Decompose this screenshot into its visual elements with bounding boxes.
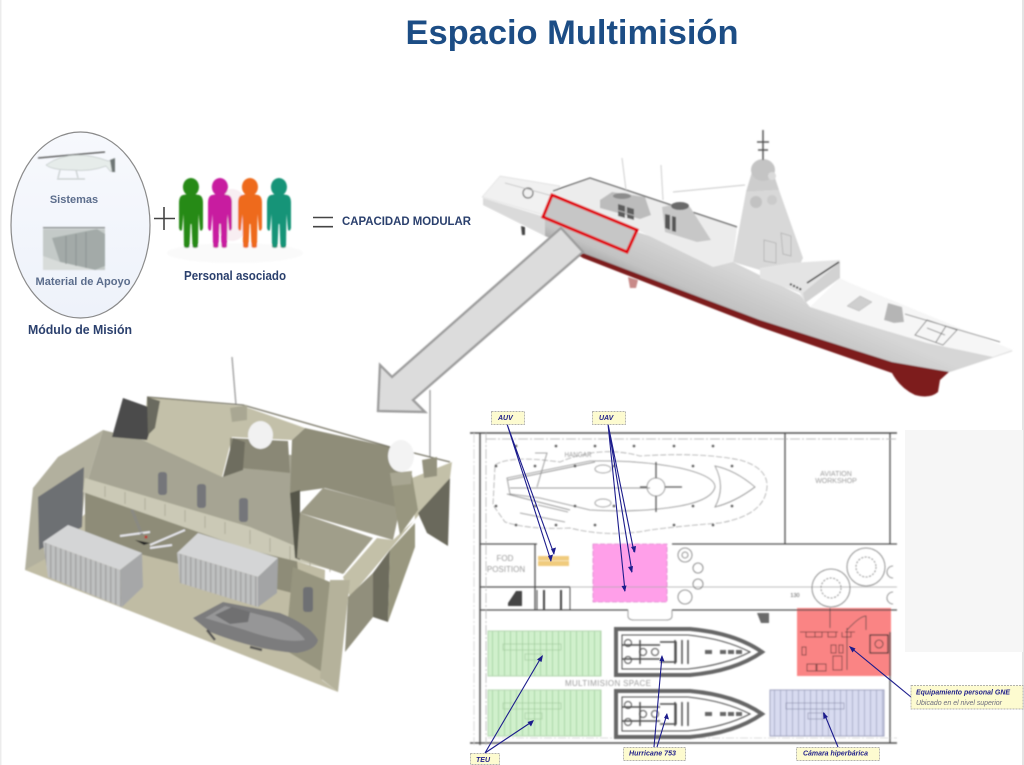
callout: Equipamiento personal GNE: Ubicado en el nivel superior — [916, 700, 1003, 707]
arrow: Equipamiento personal — [849, 646, 911, 697]
green TEU 2 — [488, 690, 601, 736]
icon: equals sign — [313, 218, 333, 227]
pink UAV zone — [593, 544, 667, 602]
back wall upper — [85, 430, 297, 560]
callout: Hurricane 753 — [624, 748, 686, 760]
roof rail — [553, 178, 737, 227]
structure lines — [470, 433, 897, 745]
label: FOD position: FOD — [497, 554, 514, 563]
icon: associated personnel — [167, 178, 303, 263]
arrow: UAV — [608, 424, 636, 592]
hull side panel dark — [373, 550, 390, 622]
arrow: TEU — [485, 655, 543, 753]
label: CAPACIDAD MODULAR: CAPACIDAD MODULAR — [342, 216, 472, 228]
callout: UAV — [592, 412, 626, 424]
bow gun — [884, 303, 904, 323]
label: Sistemas: Sistemas — [50, 194, 98, 206]
hyperbaric chamber container — [770, 690, 884, 736]
hangar roof — [553, 178, 737, 267]
roof module — [600, 192, 651, 219]
model: multi-mission hangar cutaway — [25, 357, 452, 692]
red lower hull — [545, 234, 950, 396]
window — [239, 498, 248, 522]
main mast — [757, 130, 769, 160]
label: workshop: WORKSHOP — [815, 478, 857, 485]
label: Módulo de Misión: Módulo de Misión — [28, 323, 132, 337]
funnel — [662, 203, 711, 242]
bridge block — [760, 260, 840, 303]
callout: TEU — [470, 754, 500, 764]
callout: Hurricane 753: Hurricane 753 — [629, 750, 676, 758]
window — [197, 484, 206, 508]
photo: support container — [43, 227, 105, 270]
callout: Cámara hiperbárica — [796, 748, 880, 760]
skeg — [628, 277, 638, 288]
UAV on floor — [120, 530, 185, 548]
front wall edge — [320, 580, 350, 692]
radome right — [388, 440, 414, 486]
rescue boat 2 — [616, 691, 762, 737]
red personnel zone — [797, 608, 891, 676]
hull side — [483, 200, 1013, 372]
personnel room furniture — [800, 608, 888, 671]
highlighted multi-mission space — [543, 195, 637, 252]
RHIB boat — [193, 602, 318, 653]
rescue boat 1 — [616, 629, 762, 675]
thin masts on roof — [622, 158, 745, 200]
green TEU 1 — [488, 631, 601, 676]
main tower — [733, 190, 803, 272]
plan: deck layout drawing — [470, 433, 897, 745]
callout arrows — [485, 424, 911, 753]
balcony — [83, 478, 345, 573]
small roof bases — [230, 405, 247, 422]
callout: TEU: TEU — [476, 757, 491, 764]
hangar tie-down dots — [495, 445, 733, 526]
callout: Equipamiento personal GNE: Equipamiento personal GNE — [916, 690, 1010, 696]
label: hangar: HANGAR — [564, 452, 592, 459]
stern flight deck — [482, 176, 560, 216]
left wall — [25, 430, 103, 570]
arrow: ship to module — [378, 228, 583, 412]
icon: plus sign — [154, 207, 175, 230]
callout: Equipamiento personal GNE — [911, 686, 1023, 709]
helicopter outline — [493, 452, 767, 534]
deck fittings — [678, 548, 893, 607]
callout: UAV: UAV — [599, 415, 615, 422]
panel: módulo de misión — [11, 132, 150, 337]
lower right wall — [285, 567, 330, 672]
dark niche — [290, 490, 300, 560]
roof deck — [143, 397, 305, 477]
stair details — [508, 590, 769, 623]
ship: frigate render — [482, 130, 1013, 396]
arrow: Cámara hiperbárica — [823, 712, 838, 747]
arrow: Hurricane 753 — [654, 655, 669, 747]
callout: AUV — [492, 412, 524, 424]
yellow AUV zone — [538, 556, 569, 566]
label: Material de Apoyo: Material de Apoyo — [36, 276, 131, 288]
hull side panel mid — [388, 523, 415, 622]
callout: AUV: AUV — [497, 415, 514, 422]
fore deck — [810, 278, 1013, 357]
drawing: plan labels — [487, 452, 857, 688]
lower door — [303, 587, 313, 612]
upper-right wall — [290, 428, 405, 507]
figure: teal — [267, 178, 291, 248]
floor — [25, 500, 338, 692]
radome top — [248, 421, 273, 449]
deck strip right — [343, 462, 452, 597]
label: multimision space: MULTIMISION SPACE — [565, 679, 651, 688]
mid block inner wall — [300, 488, 400, 540]
roller door — [38, 467, 84, 550]
ladder structure — [223, 438, 245, 477]
dark radar panel — [112, 398, 157, 440]
callout: Cámara hiperbárica: Cámara hiperbárica — [803, 750, 868, 758]
title: Espacio Multimisión — [406, 14, 738, 52]
hull side panel — [345, 573, 373, 652]
figure: orange — [238, 178, 262, 248]
deck markings — [905, 314, 1000, 345]
container right — [177, 533, 278, 607]
plan: empty light panel — [905, 430, 1023, 652]
icon: unmanned helicopter — [38, 152, 115, 179]
label: frame number: 130 — [790, 593, 800, 599]
figure: magenta — [208, 178, 232, 248]
label: FOD position line 2: POSITION — [487, 565, 525, 574]
window — [158, 472, 167, 495]
antenna left — [232, 357, 236, 405]
label: aviation: AVIATION — [820, 471, 852, 478]
mid block front face — [297, 513, 373, 574]
oval container — [11, 132, 150, 318]
hull side recess — [418, 478, 450, 546]
container left — [43, 525, 143, 607]
propeller — [521, 226, 525, 235]
arrow: AUV — [507, 424, 556, 562]
label: Personal asociado: Personal asociado — [184, 269, 286, 283]
tower column — [392, 475, 418, 535]
figure: green — [179, 178, 203, 248]
VLS grid — [847, 296, 872, 311]
back wall lower — [85, 492, 300, 595]
antenna right — [429, 390, 431, 457]
